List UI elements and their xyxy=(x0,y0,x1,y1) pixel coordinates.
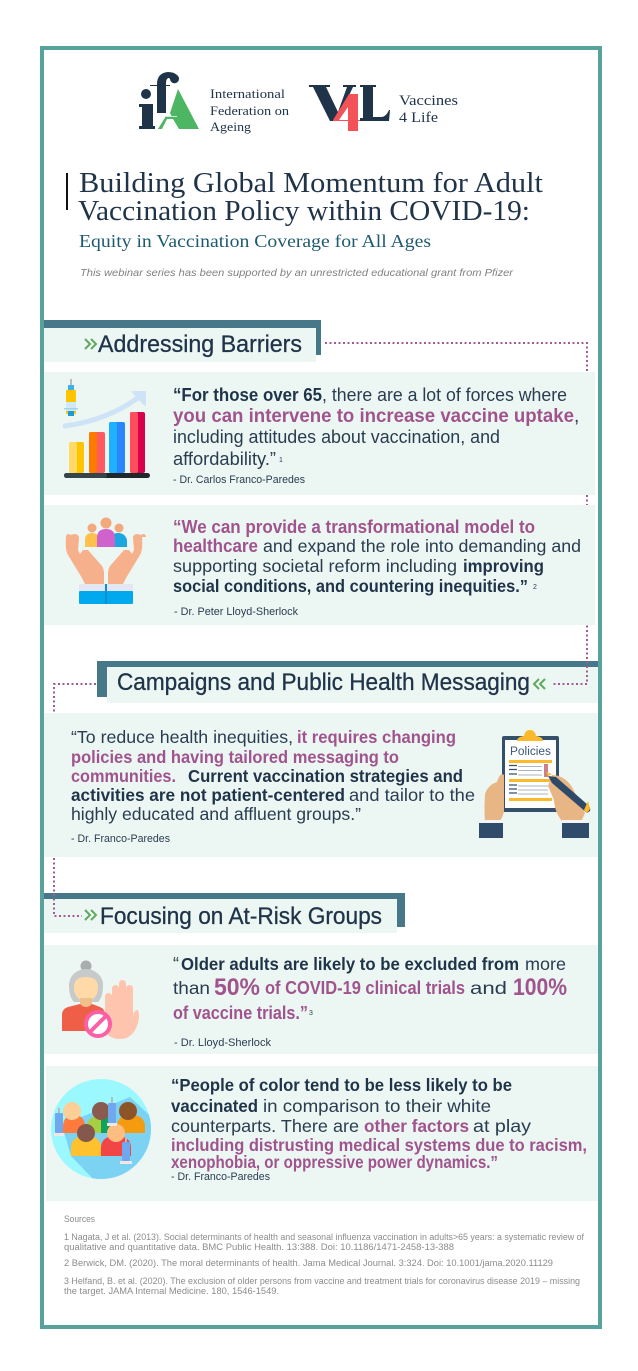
panel: quote on tailored messaging: - Dr. Franco-Paredes xyxy=(71,833,170,845)
logo: International Federation on Ageing xyxy=(139,72,290,134)
panel: quote on clinical trials: more xyxy=(525,954,566,974)
heading: Focusing on At-Risk Groups xyxy=(44,893,405,933)
panel: quote Franco-Paredes: - Dr. Carlos Franco-Paredes xyxy=(173,474,305,486)
panel: quote Franco-Paredes: including attitudes about vaccination, and xyxy=(173,427,500,447)
icon: vaccinated diverse group xyxy=(51,1079,151,1179)
panel: quote Franco-Paredes: 1 xyxy=(279,457,283,464)
logo: International Federation on Ageing: Ageing xyxy=(210,119,252,134)
panel: quote on tailored messaging: Current vaccination strategies and xyxy=(188,766,463,786)
logo: Vaccines 4 Life xyxy=(309,85,458,131)
panel: quote on clinical trials: - Dr. Lloyd-Sherlock xyxy=(174,1037,271,1049)
icon: policies clipboard with hands xyxy=(479,730,590,838)
panel: quote Lloyd-Sherlock: 2 xyxy=(533,584,537,591)
logo: International Federation on Ageing: International xyxy=(210,86,285,101)
icon: policies clipboard with hands: Policies xyxy=(510,746,551,758)
title block: Equity in Vaccination Coverage for All Ages xyxy=(79,231,431,251)
panel: quote on people of color: vaccinated xyxy=(171,1096,258,1116)
sources: qualitative and quantitative data. BMC Public Health. 13:388. Doi: 10.1186/1471-2458-13-388 xyxy=(64,1242,454,1252)
sources xyxy=(64,1214,584,1296)
panel: quote Franco-Paredes: , there are a lot of forces where xyxy=(322,385,567,405)
panel: quote on tailored messaging xyxy=(44,713,598,857)
title block: Vaccination Policy within COVID-19: xyxy=(78,195,530,227)
panel: quote on people of color: counterparts. There are xyxy=(171,1116,359,1136)
panel: quote on tailored messaging: and tailor to the xyxy=(349,785,475,805)
icon: hands holding people xyxy=(66,518,146,604)
panel: quote on people of color: in comparison to their white xyxy=(263,1096,491,1116)
panel: quote Lloyd-Sherlock: - Dr. Peter Lloyd-Sherlock xyxy=(174,606,298,618)
panel: quote on clinical trials: 50% xyxy=(214,974,260,1001)
panel: quote on tailored messaging: it requires changing xyxy=(297,727,456,747)
panel: quote Lloyd-Sherlock: improving xyxy=(463,556,544,576)
heading: Addressing Barriers: Addressing Barriers xyxy=(98,331,302,358)
panel: quote Lloyd-Sherlock: and expand the role into demanding and xyxy=(263,536,581,556)
panel: quote on tailored messaging: “To reduce health inequities, xyxy=(71,727,293,747)
title block: Building Global Momentum for Adult xyxy=(79,167,543,199)
panel: quote Lloyd-Sherlock xyxy=(44,505,595,625)
panel: quote on clinical trials: Older adults are likely to be excluded from xyxy=(181,954,519,974)
panel: quote Lloyd-Sherlock: social conditions, and countering inequities.” xyxy=(173,576,528,596)
panel: quote Lloyd-Sherlock: healthcare xyxy=(173,536,258,556)
title block xyxy=(66,167,543,279)
heading: Campaigns and Public Health Messaging: Campaigns and Public Health Messaging xyxy=(117,669,530,696)
panel: quote on tailored messaging: policies and having tailored messaging to xyxy=(71,747,399,767)
panel: quote on clinical trials: 100% xyxy=(513,974,567,1001)
panel: quote Franco-Paredes xyxy=(44,372,595,495)
panel: quote on clinical trials: “ xyxy=(173,954,179,974)
panel: quote on people of color: including distrusting medical systems due to racism, xyxy=(171,1135,587,1155)
panel: quote on people of color: other factors xyxy=(364,1116,469,1136)
panel: quote Franco-Paredes: you can intervene to increase vaccine uptake xyxy=(173,405,574,427)
heading: Addressing Barriers xyxy=(44,320,321,362)
logo: Vaccines 4 Life: Vaccines xyxy=(399,93,458,109)
sources: 2 Berwick, DM. (2020). The moral determinants of health. Jama Medical Journal. 3:324. Doi: 10.1001/jama.2020.11129 xyxy=(64,1258,553,1268)
panel: quote on people of color: - Dr. Franco-Paredes xyxy=(171,1171,270,1183)
panel: quote on clinical trials: of COVID-19 clinical trials xyxy=(265,978,465,998)
panel: quote on people of color: at play xyxy=(473,1116,531,1136)
sources: 1 Nagata, J et al. (2013). Social determinants of health and seasonal influenza vaccination in adults>65 years: a systematic review of xyxy=(64,1232,584,1242)
panel: quote Franco-Paredes: affordability.” xyxy=(173,449,276,469)
logo: International Federation on Ageing: Federation on xyxy=(210,103,290,118)
panel: quote Lloyd-Sherlock: “We can provide a transformational model to xyxy=(173,517,535,537)
logo: Vaccines 4 Life: 4 Life xyxy=(399,110,438,126)
sources: Sources xyxy=(64,1214,95,1224)
panel: quote on tailored messaging: communities. xyxy=(71,766,176,786)
panel: quote on clinical trials xyxy=(44,945,598,1054)
panel: quote on people of color: xenophobia, or oppressive power dynamics.” xyxy=(171,1152,498,1172)
title block: This webinar series has been supported by an unrestricted educational grant from Pfizer xyxy=(80,267,514,279)
icon: bar chart with syringe xyxy=(64,379,150,478)
panel: quote Lloyd-Sherlock: supporting societal reform including xyxy=(173,556,457,576)
panel: quote on clinical trials: and xyxy=(470,978,507,998)
sources: 3 Helfand, B. et al. (2020). The exclusion of older persons from vaccine and treatment trials for coronavirus disease 2019 – missing xyxy=(64,1276,580,1286)
heading: Focusing on At-Risk Groups: Focusing on At-Risk Groups xyxy=(100,903,382,930)
panel: quote Franco-Paredes: “For those over 65 xyxy=(173,385,322,405)
panel: quote on people of color xyxy=(46,1066,598,1201)
sources: the target. JAMA Internal Medicine. 180, 1546-1549. xyxy=(64,1286,279,1296)
panel: quote on clinical trials: than xyxy=(173,978,210,998)
panel: quote Franco-Paredes: , xyxy=(574,406,579,427)
heading: Campaigns and Public Health Messaging xyxy=(97,661,598,703)
panel: quote on clinical trials: of vaccine trials.” xyxy=(173,1003,308,1023)
panel: quote on clinical trials: 3 xyxy=(309,1010,313,1017)
icon: older woman with stop hand xyxy=(62,960,139,1039)
panel: quote on tailored messaging: highly educated and affluent groups.” xyxy=(71,804,361,824)
dotted connector lines xyxy=(54,343,587,916)
panel: quote on people of color: “People of color tend to be less likely to be xyxy=(171,1075,512,1095)
panel: quote on tailored messaging: activities are not patient-centered xyxy=(71,785,345,805)
